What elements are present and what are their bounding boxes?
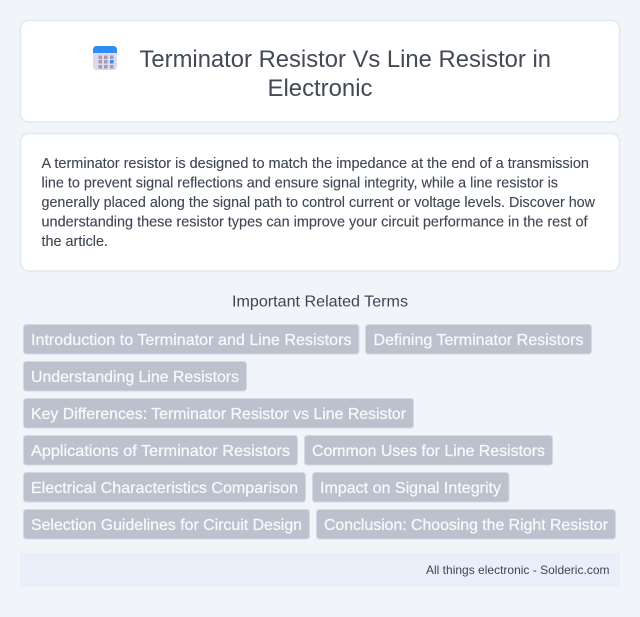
- footer: All things electronic - Solderic.com: [426, 563, 610, 577]
- tag: impact on signal integrity: Impact on Signal Integrity: [320, 480, 501, 497]
- text block: description: generally placed along the signal path to control current or voltage levels. Discover how: [42, 195, 596, 211]
- text block: description: the article.: [42, 234, 108, 250]
- tag: defining terminator resistors: Defining Terminator Resistors: [374, 332, 584, 349]
- heading: important related terms: Important Related Terms: [232, 294, 408, 310]
- tag: introduction: Introduction to Terminator and Line Resistors: [31, 332, 352, 349]
- tag: key differences: Key Differences: Terminator Resistor vs Line Resistor: [31, 406, 407, 423]
- tag: common uses: Common Uses for Line Resistors: [312, 443, 545, 460]
- tag: understanding line resistors: Understanding Line Resistors: [31, 369, 239, 386]
- text block: description: [42, 156, 596, 250]
- title: [140, 46, 551, 102]
- tag: understanding line resistors: [24, 362, 246, 391]
- tag: conclusion: Conclusion: Choosing the Right Resistor: [324, 517, 609, 534]
- tag: selection guidelines: [24, 510, 310, 539]
- tag: applications: [24, 436, 298, 465]
- tag: defining terminator resistors: [366, 324, 592, 354]
- text block: description: understanding these resistor types can improve your circuit performance in the rest of: [42, 214, 588, 230]
- tag: selection guidelines: Selection Guidelines for Circuit Design: [31, 517, 302, 534]
- panel: title header: [20, 20, 620, 122]
- tag: key differences: [24, 398, 414, 428]
- title: Terminator Resistor Vs Line Resistor in: [140, 46, 551, 73]
- text block: description: line to prevent signal reflections and ensure signal integrity, while a line resistor is: [42, 176, 558, 192]
- tag: applications: Applications of Terminator Resistors: [31, 443, 290, 460]
- tag: common uses: [304, 436, 552, 465]
- tag: impact on signal integrity: [312, 472, 509, 502]
- footer: [20, 553, 620, 587]
- text block: description: A terminator resistor is designed to match the impedance at the end of a transmission: [42, 156, 589, 172]
- panel: description: [20, 134, 620, 271]
- tag: introduction: [24, 324, 359, 354]
- title: Electronic: [268, 75, 372, 102]
- tag: conclusion: [316, 510, 616, 539]
- tag: electrical characteristics: Electrical Characteristics Comparison: [31, 480, 298, 497]
- tag: electrical characteristics: [24, 472, 306, 502]
- icon: calendar: [93, 46, 117, 70]
